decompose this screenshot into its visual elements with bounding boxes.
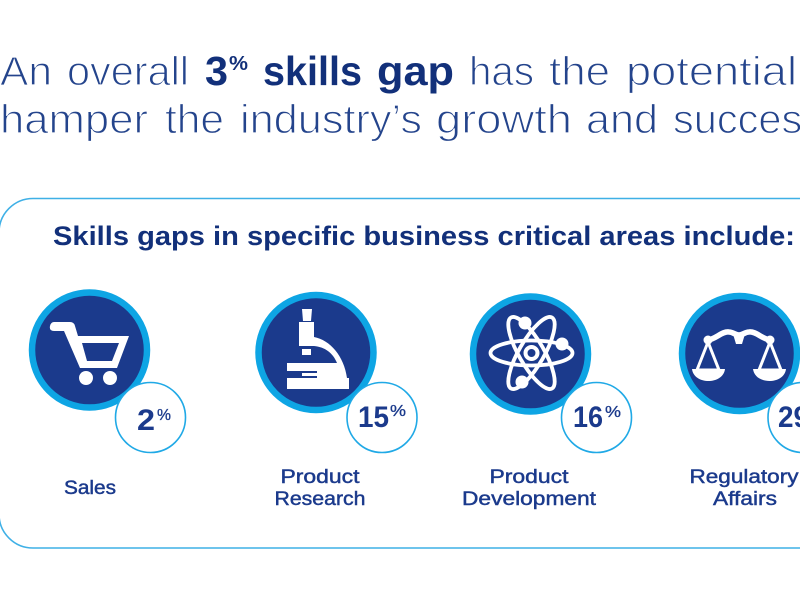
title: gap (377, 48, 454, 94)
item: product development (462, 296, 632, 510)
icon: scales (682, 296, 797, 411)
value: 2%: 2 (137, 404, 155, 437)
label: product research: Product (280, 467, 360, 488)
value: 15%: % (390, 403, 406, 420)
title: has (469, 48, 534, 94)
title: % (229, 53, 248, 75)
title: skills (263, 48, 362, 94)
value: 16%: 16 (573, 401, 603, 434)
title: industry’s (240, 96, 422, 142)
value: 15% (347, 382, 417, 452)
icon: shopping cart (32, 292, 147, 408)
title: hamper (0, 96, 148, 142)
title (0, 48, 800, 142)
item: sales (32, 292, 186, 499)
item: product development: Development (462, 489, 597, 510)
title: growth (436, 96, 572, 142)
value: 2% (116, 382, 186, 452)
title: the (549, 48, 610, 94)
icon: microscope (258, 295, 374, 410)
value: 29% (768, 382, 800, 452)
item: product research (258, 295, 417, 510)
title: the (165, 96, 224, 142)
title: 3 (205, 48, 228, 94)
panel: skills gaps (0, 198, 800, 548)
title: potential (626, 48, 797, 94)
item: product research: Research (274, 489, 366, 510)
value: 16% (562, 382, 632, 452)
value: 15%: 15 (358, 401, 389, 434)
label: product development: Product (490, 467, 569, 488)
item: regulatory affairs (682, 296, 800, 510)
icon: atom (473, 296, 588, 412)
title: An (0, 48, 52, 94)
item: regulatory affairs: Affairs (713, 489, 777, 510)
value: 16%: % (605, 404, 621, 421)
title: and (586, 96, 658, 142)
label: sales: Sales (64, 478, 116, 499)
panel heading: Skills gaps in specific business critical areas include: (53, 221, 795, 251)
value: 2%: % (157, 407, 171, 424)
label: regulatory affairs: Regulatory (690, 467, 799, 488)
title: overall (67, 48, 189, 94)
